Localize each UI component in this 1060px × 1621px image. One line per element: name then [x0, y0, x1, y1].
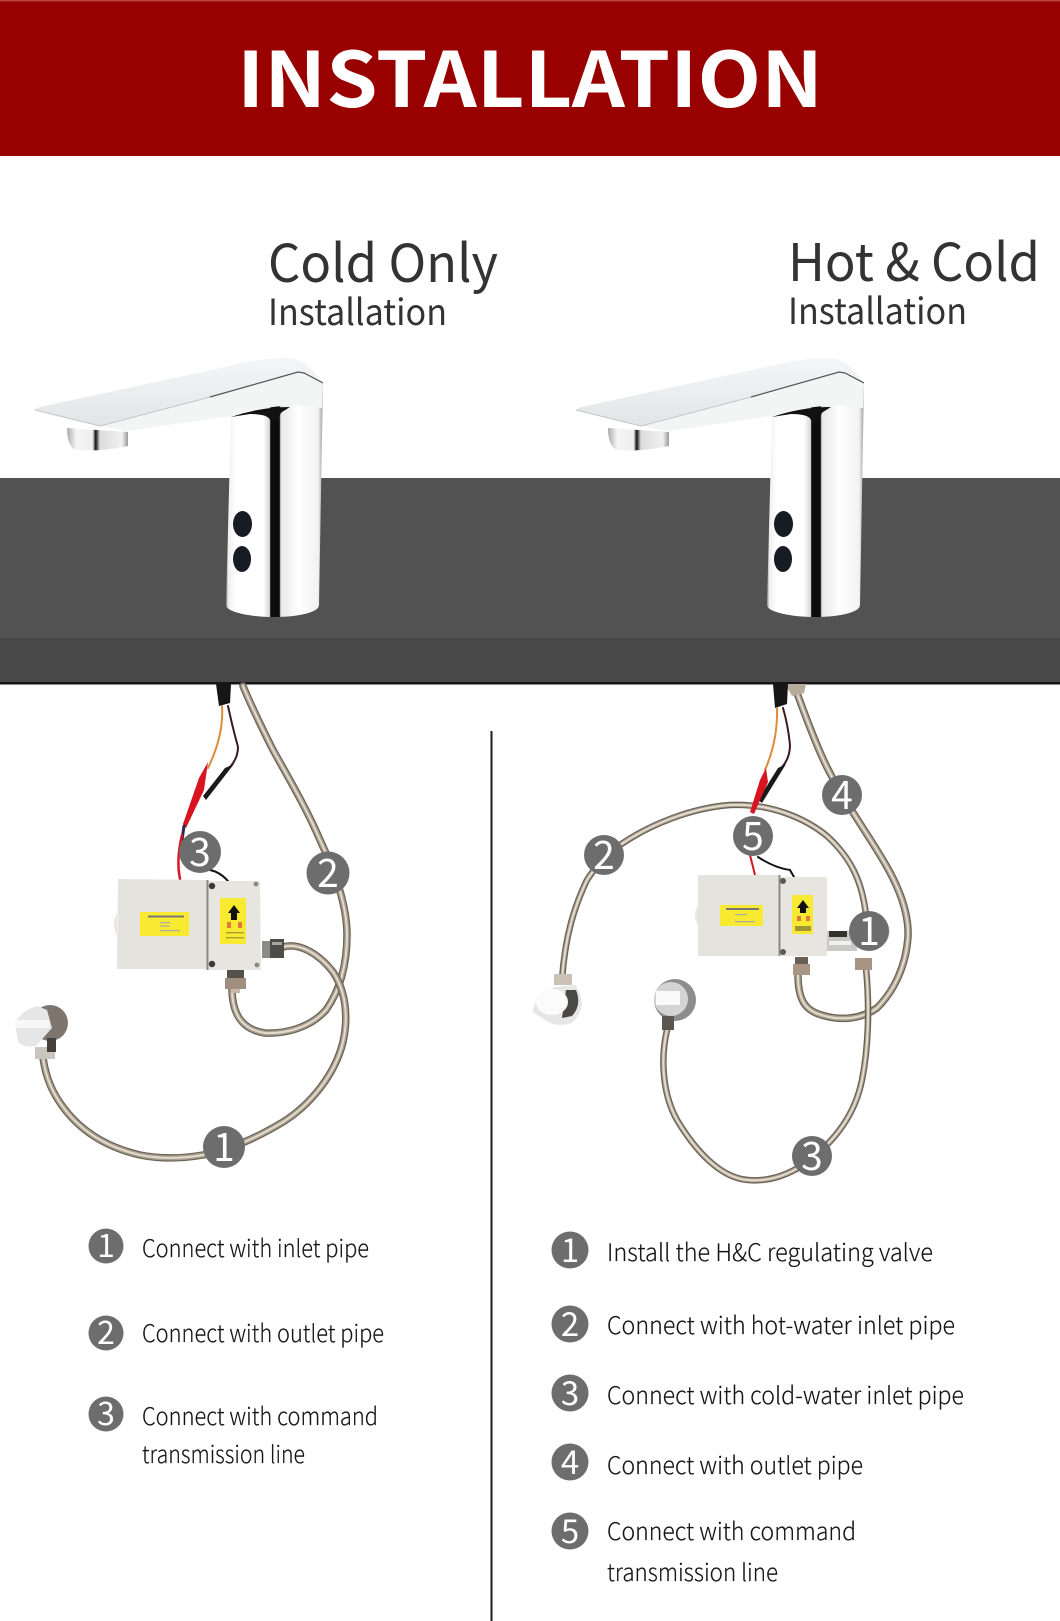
heading: cold only [268, 222, 498, 336]
callout badge: hot 4 [822, 765, 862, 821]
inlet hose [43, 946, 346, 1158]
callout badge: cold 2: 2 [317, 843, 339, 899]
yellow label [720, 905, 763, 926]
faucet: cold only [35, 358, 323, 617]
step 3: Connect with cold-water inlet pipe [607, 1376, 964, 1411]
step 3: 3 [97, 1389, 115, 1435]
callout badge: hot 5: 5 [742, 806, 764, 862]
command wires [750, 684, 794, 877]
step 4: Connect with outlet pipe [607, 1446, 863, 1481]
callout badge: cold 1: 1 [213, 1117, 235, 1173]
callout badge: hot 2 [584, 825, 624, 881]
step list: hot and cold [552, 1224, 964, 1588]
sensor windows [774, 511, 793, 572]
step 1: Connect with inlet pipe [142, 1229, 369, 1264]
heading: cold only: Cold Only [268, 222, 498, 297]
step 5: transmission line [607, 1553, 778, 1588]
step 3 [88, 1389, 378, 1470]
hot water hose [562, 805, 866, 980]
fittings [793, 931, 872, 975]
heading: cold only: Installation [268, 284, 447, 336]
faucet: hot and cold [576, 358, 864, 617]
shutoff valve [15, 1005, 68, 1059]
sensor windows [233, 511, 252, 572]
vertical divider [490, 731, 492, 1621]
step 1 [552, 1224, 933, 1272]
control box [114, 879, 284, 993]
step 2: 2 [561, 1298, 579, 1346]
step 1: 1 [97, 1221, 115, 1267]
title: INSTALLATION [237, 19, 823, 129]
step 5: 5 [561, 1505, 579, 1553]
step 1: Install the H&C regulating valve [607, 1233, 933, 1268]
top fitting [785, 684, 806, 696]
step 1: 1 [561, 1224, 579, 1272]
step 2 [88, 1308, 384, 1354]
step 5 [552, 1505, 856, 1588]
control box [695, 875, 872, 975]
callout badge: cold 3 [179, 822, 221, 878]
callout badge: cold 1 [203, 1117, 245, 1173]
countertop [0, 478, 1060, 684]
step 2: Connect with hot-water inlet pipe [607, 1306, 955, 1341]
step 5: Connect with command [607, 1512, 856, 1547]
callout badge: cold 2 [306, 843, 350, 899]
step 3: transmission line [142, 1435, 305, 1470]
callout badge: hot 2: 2 [593, 825, 615, 881]
step 3 [552, 1367, 964, 1415]
step 4: 4 [561, 1436, 579, 1484]
yellow arrow label [220, 898, 246, 944]
callout badge: hot 5 [733, 806, 773, 862]
hot valve [533, 974, 582, 1025]
yellow label [140, 912, 189, 936]
callout badge: hot 1 [849, 901, 889, 957]
title banner [0, 0, 1060, 156]
yellow arrow label [792, 895, 813, 934]
cold water hose [663, 968, 868, 1180]
diagram: hot and cold plumbing [533, 684, 908, 1180]
callout badge: hot 1: 1 [858, 901, 880, 957]
heading: hot and cold: Hot & Cold [788, 221, 1040, 296]
step 2 [552, 1298, 955, 1346]
step 2: Connect with outlet pipe [142, 1314, 384, 1349]
outlet hose [232, 686, 347, 1033]
outlet hose [797, 693, 908, 1018]
step list: cold only [88, 1221, 384, 1470]
fittings [225, 939, 284, 993]
step 2: 2 [97, 1308, 115, 1354]
heading: hot and cold: Installation [788, 283, 967, 335]
cold valve [654, 979, 696, 1030]
callout badge: hot 3: 3 [801, 1126, 823, 1182]
step 4 [552, 1436, 863, 1484]
heading: hot and cold [788, 221, 1040, 335]
H&C regulating valve chrome [860, 917, 890, 947]
step 3: 3 [561, 1367, 579, 1415]
command wires [178, 684, 238, 881]
callout badge: hot 3 [792, 1126, 832, 1182]
diagram: cold only plumbing [15, 684, 347, 1158]
step 3: Connect with command [142, 1397, 378, 1432]
callout badge: cold 3: 3 [189, 822, 211, 878]
step 1 [88, 1221, 369, 1267]
callout badge: hot 4: 4 [831, 765, 853, 821]
